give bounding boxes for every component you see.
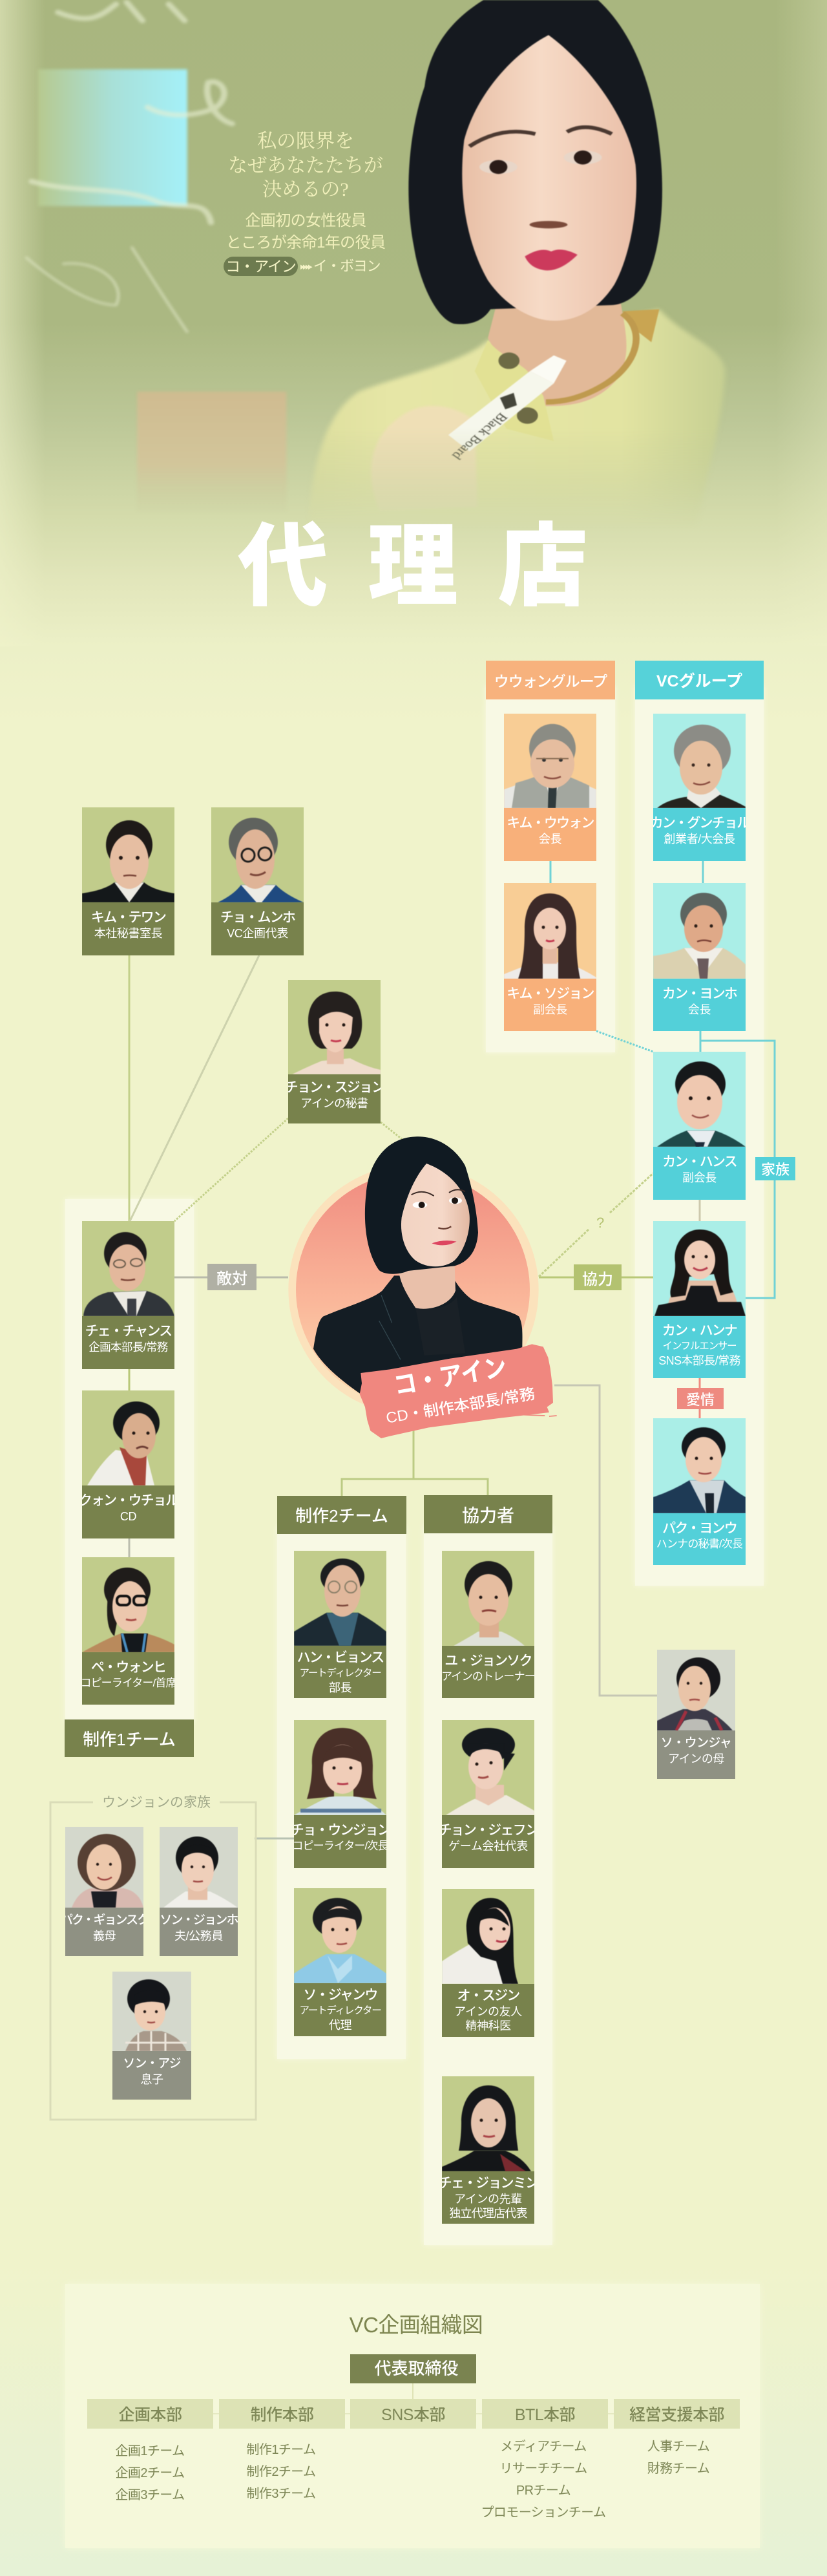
actor credit [224,257,380,276]
name label: 会長 [539,833,561,846]
name label: VC企画代表 [227,927,288,940]
hero blurred decorations [25,0,287,480]
tag: question mark: ? [596,1215,604,1231]
card: Son Jongho [160,1827,238,1956]
line: Sujeong to Chansu (dotted) [174,1118,288,1221]
teams: planning: 企画1チーム [116,2444,184,2458]
portrait [294,1888,386,1983]
teams: BTL: メディアチーム [500,2440,587,2454]
name label: カン・ハンナ [662,1323,737,1338]
card: Kim Taewan [82,807,174,955]
card: Kang Hansu [653,1052,746,1200]
name label: 義母 [93,1930,116,1943]
hero background glow [0,0,827,646]
line: family bracket [700,1041,775,1298]
name label: アートディレクター [299,2005,381,2016]
actor name: ▶▶▶▶ イ・ボヨン [300,258,380,274]
name label [288,1074,381,1123]
panel: Wuwon group background [486,685,615,1052]
card: So Jangwoo [294,1888,386,2036]
card: Han Byeongsu [294,1551,386,1698]
teams: management support: 人事チーム [647,2440,709,2454]
department: production [219,2399,345,2429]
line: family to Eunjung [255,1837,295,1840]
portrait [211,807,304,902]
portrait [288,980,381,1074]
panel: team 1 background [65,1199,194,1723]
name label [653,1316,746,1378]
portrait [653,1221,746,1316]
name label [294,1983,386,2036]
line: Yongho to Hansu [699,1031,702,1052]
card: Oh Sujin [442,1889,534,2037]
name label [65,1908,143,1956]
tag: love: 愛情 [686,1391,715,1408]
name label [442,1646,534,1698]
name label: ソン・アジ [123,2057,181,2070]
portrait [65,1827,143,1908]
eyes, brows, nose, lips [470,127,612,270]
name label: ハンナの秘書/次長 [656,1538,742,1550]
portrait [504,714,596,808]
name label: チェ・チャンス [85,1324,171,1339]
name label: 息子 [140,2073,163,2086]
card: Yu Jeongseok [442,1551,534,1698]
portrait [112,1972,191,2051]
name label: 夫/公務員 [174,1930,223,1943]
card: Choi Changsu [82,1221,174,1369]
name label [294,1646,386,1698]
card: Cho Munho [211,807,304,955]
name label: ソ・ジャンウ [303,1988,377,2003]
neck [399,1259,455,1309]
name label: 会長 [688,1003,711,1016]
name label [160,1908,238,1956]
portrait [82,1390,174,1485]
hero tagline: 決めるの? [262,179,349,200]
line: Hansu to Hanna [699,1193,700,1221]
hero description [226,212,385,251]
department: planning [87,2399,213,2429]
name label: 企画本部長/常務 [89,1341,168,1354]
hero description: ところが余命1年の役員 [226,234,385,251]
name label: ペ・ウォンヒ [91,1660,165,1675]
teams: planning [116,2444,184,2502]
teams: production: 制作2チーム [247,2465,315,2479]
name label: インフルエンサー [663,1341,736,1352]
portrait [653,1418,746,1513]
card: So Eunja [657,1650,735,1779]
card: Chon Jaehun [442,1720,534,1868]
hero tagline [228,131,383,200]
back hair [408,0,662,324]
teams: BTL: リサーチチーム [499,2462,587,2476]
name label [653,1147,746,1200]
title: 代理店 [238,516,627,617]
card: Kang Hanna [653,1221,746,1378]
card: Cho Eunjung [294,1720,386,1868]
teams: BTL [481,2440,606,2520]
card: Kim Wuwon [504,714,596,861]
department: BTL [482,2399,608,2429]
hero portrait: Ko Ain [315,0,726,504]
name label: アインの友人 [454,2005,522,2018]
portrait [442,1551,534,1646]
name label [653,808,746,861]
name label [653,979,746,1031]
line: Sujeong to Ain (dotted) [381,1122,402,1139]
line: Munho to Chansu [130,955,259,1221]
family frame title: ウンジョンの家族 [102,1795,211,1810]
name label: チョ・ムンホ [220,910,295,925]
circle [288,1164,539,1415]
name label: カン・ハンス [662,1155,737,1169]
heading: Wuwon group [486,661,615,699]
panel: collaborators background [424,1526,552,2245]
name label: ゲーム会社代表 [448,1840,528,1853]
name label [82,1485,174,1538]
chart title: VC企画組織図 [350,2313,483,2337]
department: BTL: BTL本部 [515,2406,575,2424]
department: SNS: SNS本部 [381,2406,445,2424]
line: Ain to mother [554,1385,657,1696]
teams: production: 制作1チーム [247,2443,315,2457]
heading: production team 2 [277,1496,406,1534]
teams: BTL: プロモーションチーム [481,2506,606,2520]
name label [211,902,304,955]
name label: SNS本部長/常務 [658,1354,740,1367]
blouse [315,308,726,498]
name label: 副会長 [682,1171,717,1184]
teams: production: 制作3チーム [247,2487,315,2501]
name label: ハン・ビョンス [297,1650,383,1665]
tag: family: 家族 [761,1162,790,1178]
portrait [82,1221,174,1316]
teams: management support: 財務チーム [647,2462,709,2476]
panel: VC group background [635,685,764,1586]
portrait [653,1052,746,1147]
hero tagline: なぜあなたたちが [228,155,383,176]
hair [365,1136,478,1274]
name label [442,2171,534,2224]
face [401,1164,470,1266]
teams: planning: 企画2チーム [116,2466,184,2480]
portrait [653,883,746,979]
name label: キム・ウウォン [507,816,594,831]
name label: アインのトレーナー [442,1670,534,1683]
card: Kwon Ucheol [82,1390,174,1538]
name label [82,1316,174,1369]
name label [82,902,174,955]
name label: 精神科医 [465,2019,511,2032]
tag: love [677,1388,724,1409]
line: Taewan to Chansu [128,955,131,1221]
name label: オ・スジン [457,1988,519,2003]
name label [442,1984,534,2037]
name label [504,979,596,1031]
line: unknown relation (dotted) [539,1173,653,1277]
banner name: コ・アイン [392,1353,509,1401]
department: planning: 企画本部 [118,2406,182,2424]
hero tagline: 私の限界を [257,131,354,152]
department: management support [614,2399,740,2429]
heading: production team 1 [65,1719,194,1757]
portrait [442,2076,534,2171]
name label: 代理 [329,2019,351,2032]
line: So-jung to Hansu (dotted) [596,1031,653,1052]
tag: family [755,1157,795,1180]
face [462,35,636,321]
CEO box [350,2354,476,2383]
family frame [50,1802,256,2120]
tag: cooperation: 協力 [582,1271,613,1288]
buttons [498,352,519,369]
line: Kwon to Bae [128,1538,131,1557]
portrait [160,1827,238,1908]
portrait [442,1889,534,1984]
tag: rivalry: 敵対 [216,1270,247,1288]
heading: production team 2: 制作2チーム [295,1506,388,1526]
CEO box: 代表取締役 [374,2359,459,2378]
heading: VC group [635,661,764,699]
name label: 本社秘書室長 [94,927,162,940]
name label: 部長 [329,1681,351,1694]
jacket [313,1275,523,1411]
tag: rivalry [207,1264,256,1290]
line: Wuwon to So-jung [549,861,552,883]
tag: cooperation [574,1264,622,1290]
name label: ソン・ジョンホ [160,1913,238,1927]
department: production: 制作本部 [250,2406,314,2424]
card: Chon Sujeong [288,980,381,1123]
card: Kang Guncheol [653,714,746,861]
name label [294,1815,386,1868]
card: Son Aji [112,1972,191,2100]
teams: production [247,2443,315,2501]
card: Choi Jeongmin [442,2076,534,2224]
line: Ain to teams [342,1429,488,1496]
name label: カン・ヨンホ [662,986,737,1001]
marker pen: Black Board [449,410,510,462]
portrait [657,1650,735,1730]
portrait [504,883,596,979]
panel: VC organization chart [65,2284,760,2548]
name label: キム・テワン [91,910,165,925]
banner role: CD・制作本部長/常務 [384,1385,536,1427]
portrait [82,807,174,902]
role pill: コ・アイン [225,258,296,275]
name banner [360,1344,553,1438]
name label: アートディレクター [299,1668,381,1679]
name label: ユ・ジョンソク [445,1654,532,1668]
marker pen [448,356,567,462]
name label [504,808,596,861]
line: Hanna to Hyunwoo [699,1378,700,1418]
department: management support: 経営支援本部 [629,2406,724,2424]
name label: 創業者/大会長 [664,833,735,846]
portrait [294,1551,386,1646]
neck [488,297,627,406]
center portrait: Ko Ain with circle and name banner [288,1136,557,1438]
hero description: 企画初の女性役員 [245,212,366,229]
name label [657,1730,735,1779]
collar and necklace [622,309,659,342]
name label [112,2051,191,2100]
name label: キム・ソジョン [507,986,594,1001]
name label: ソ・ウンジャ [661,1736,731,1750]
card: Kang Yongho [653,883,746,1031]
name label: 独立代理店代表 [449,2207,527,2220]
name label: アインの母 [668,1752,724,1765]
name label [82,1652,174,1705]
heading: Wuwon group: ウウォングループ [494,673,607,690]
card: Kim So-jung [504,883,596,1031]
portrait [82,1557,174,1652]
card: Park Gyeongsuk [65,1827,143,1956]
portrait [653,714,746,808]
hand [372,406,476,488]
card: Park Hyunwoo [653,1418,746,1565]
card: Bae Wonhee [82,1557,174,1705]
line: rivalry [174,1276,288,1279]
teams: BTL: PRチーム [516,2484,571,2498]
name label: 副会長 [533,1003,567,1016]
heading: VC group: VCグループ [656,672,742,690]
name label: CD [120,1510,136,1523]
heading: collaborators: 協力者 [462,1506,514,1526]
panel: team 2 background [277,1526,406,2059]
teams: planning: 企画3チーム [116,2488,184,2502]
heading: production team 1: 制作1チーム [83,1730,176,1749]
portrait [442,1720,534,1815]
line: Chansu to Kwon [128,1369,131,1390]
facial features [412,1189,465,1245]
heading: collaborators [424,1495,552,1533]
teams: management support [647,2440,709,2476]
connector from CEO to departments [412,2383,414,2399]
name label [653,1513,746,1565]
portrait [294,1720,386,1815]
name label: アインの秘書 [300,1097,368,1110]
name label: アインの先輩 [454,2193,522,2206]
line: cooperation [539,1276,653,1279]
name label: パク・ヨンウ [662,1521,737,1536]
connector across departments [104,2413,718,2414]
line: Guncheol to Yongho [702,861,704,883]
department: SNS [350,2399,476,2429]
name label [442,1815,534,1868]
